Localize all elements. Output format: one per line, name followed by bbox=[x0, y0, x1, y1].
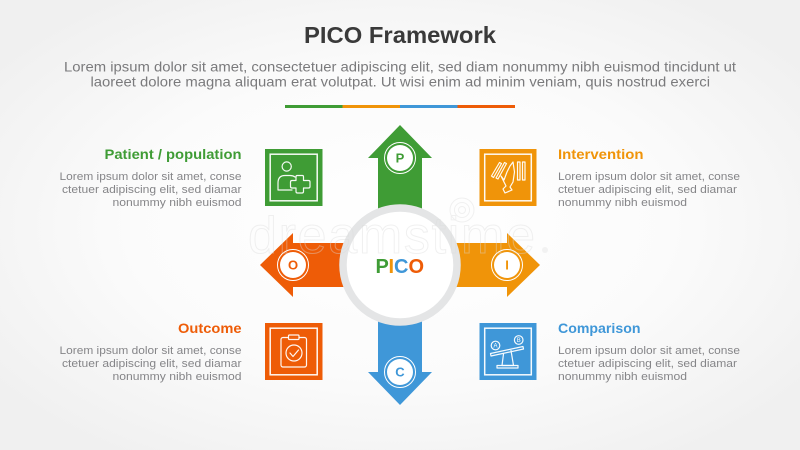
text block: outcome: ctetuer adipiscing elit, sed diamar bbox=[62, 358, 242, 370]
text block: patient bbox=[60, 171, 242, 209]
text block: comparison: Lorem ipsum dolor sit amet, conse bbox=[558, 345, 740, 357]
text block: comparison: nonummy nibh euismod bbox=[558, 371, 687, 383]
arrow P (up): P bbox=[396, 151, 405, 166]
center circle: PICO: I bbox=[388, 256, 394, 278]
icon: clipboard with check bbox=[265, 323, 322, 380]
icon: patient with plus bbox=[265, 149, 322, 206]
panel: outcome bbox=[60, 320, 322, 383]
panel: intervention bbox=[480, 146, 740, 209]
arrow C (down) bbox=[368, 318, 432, 405]
arrow I (right): I bbox=[505, 258, 509, 273]
arrow C (down): C bbox=[395, 365, 405, 380]
text block: comparison: ctetuer adipiscing elit, sed diamar bbox=[558, 358, 737, 370]
intro text bbox=[64, 58, 736, 90]
arrow O (left) bbox=[260, 233, 348, 297]
arrow O (left): O bbox=[288, 258, 298, 273]
panel: comparison bbox=[480, 320, 740, 383]
text block: outcome bbox=[60, 345, 242, 383]
heading: outcome: Outcome bbox=[178, 320, 242, 336]
text block: comparison bbox=[558, 345, 740, 383]
text block: intervention: ctetuer adipiscing elit, sed diamar bbox=[558, 184, 737, 196]
heading: comparison: Comparison bbox=[558, 320, 640, 336]
icon: hand stopping dominoes bbox=[480, 149, 536, 206]
text block: patient: nonummy nibh euismod bbox=[112, 197, 242, 209]
text block: outcome: Lorem ipsum dolor sit amet, conse bbox=[60, 345, 242, 357]
text block: intervention bbox=[558, 171, 740, 209]
colour divider bbox=[285, 105, 515, 108]
text block: intervention: Lorem ipsum dolor sit amet, conse bbox=[558, 171, 740, 183]
watermark: dreamstime bbox=[248, 207, 535, 265]
text block: patient: Lorem ipsum dolor sit amet, conse bbox=[60, 171, 242, 183]
center circle: PICO bbox=[343, 208, 457, 322]
arrow P (up) bbox=[368, 125, 432, 212]
center circle: PICO: O bbox=[408, 256, 424, 278]
intro text: laoreet dolore magna aliquam erat volutpat. Ut wisi enim ad minim veniam, quis nostrud exerci bbox=[90, 74, 710, 90]
panel: patient / population bbox=[60, 146, 322, 209]
icon: balance scale A and B: B bbox=[517, 338, 521, 344]
center circle: PICO: C bbox=[394, 256, 408, 278]
text block: outcome: nonummy nibh euismod bbox=[112, 371, 242, 383]
center circle: PICO: P bbox=[376, 256, 389, 278]
heading: patient: Patient / population bbox=[104, 146, 242, 162]
icon: balance scale A and B bbox=[480, 323, 536, 380]
intro text: Lorem ipsum dolor sit amet, consectetuer adipiscing elit, sed diam nonummy nibh euismod tincidunt ut bbox=[64, 58, 736, 74]
heading: intervention: Intervention bbox=[558, 146, 644, 162]
text block: patient: ctetuer adipiscing elit, sed diamar bbox=[62, 184, 242, 196]
arrow I (right) bbox=[452, 233, 540, 297]
title: PICO Framework bbox=[304, 22, 496, 48]
icon: balance scale A and B: A bbox=[493, 344, 498, 350]
text block: intervention: nonummy nibh euismod bbox=[558, 197, 687, 209]
